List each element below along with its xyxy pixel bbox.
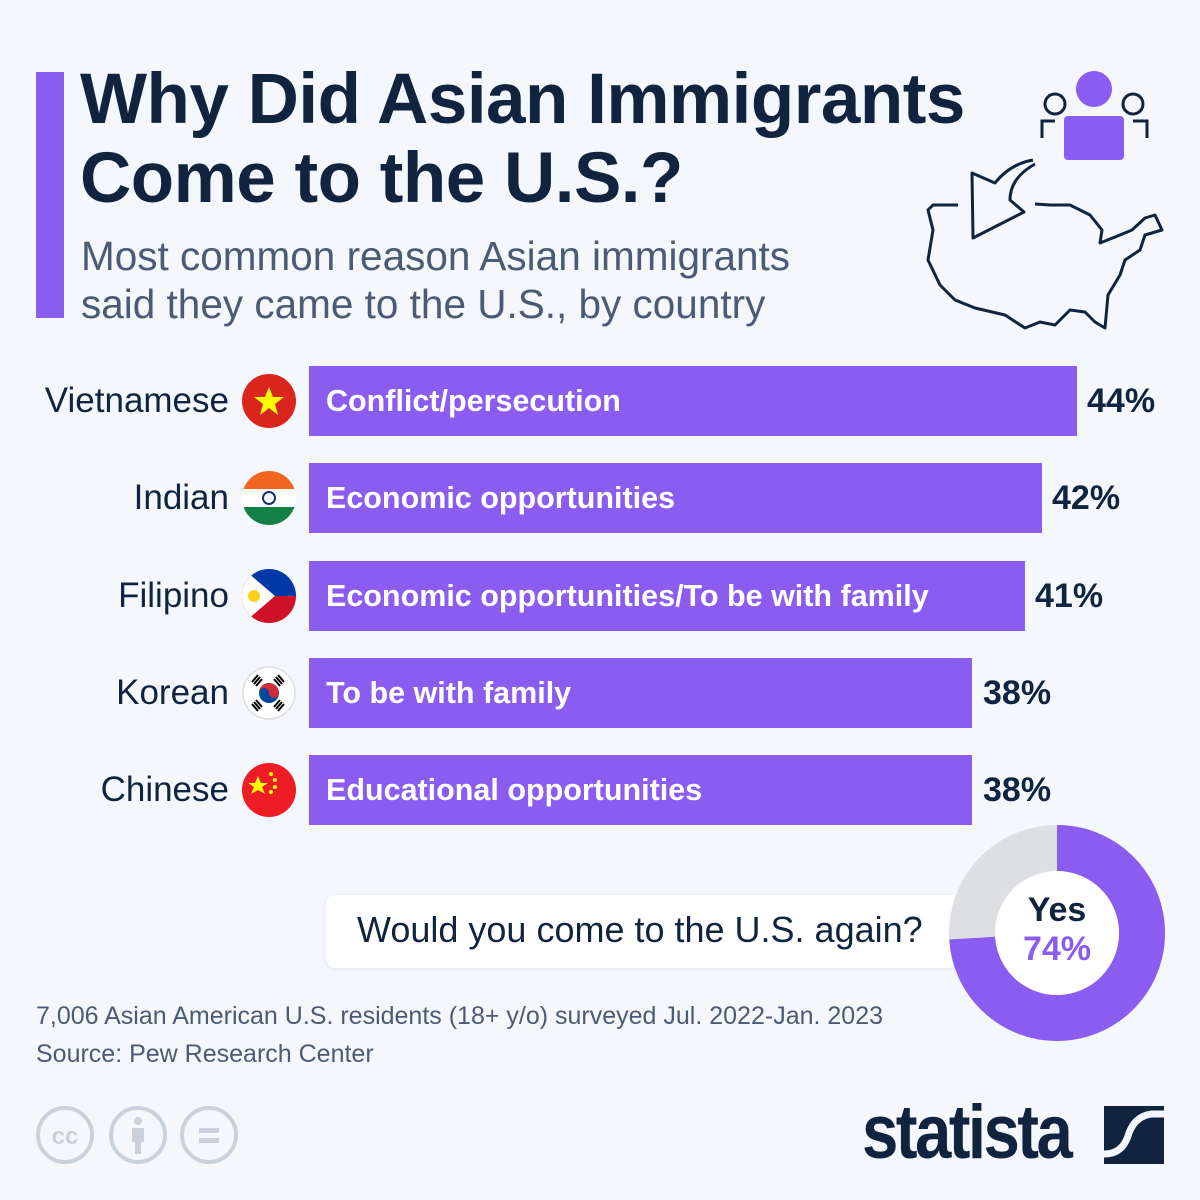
bar: Indian: Economic opportunities — [326, 481, 675, 515]
flag: China — [242, 763, 296, 817]
subtitle: said they came to the U.S., by country — [81, 281, 765, 327]
callout: question: Would you come to the U.S. again? — [357, 909, 923, 950]
flag: India — [242, 471, 296, 525]
country labels: Vietnamese — [45, 381, 229, 420]
subtitle: Most common reason Asian immigrants — [81, 233, 790, 279]
value 42%: 42% — [1052, 479, 1120, 517]
bar: Indian — [309, 463, 1042, 533]
text: Chinese — [101, 770, 229, 809]
bar: Korean — [309, 658, 972, 728]
bar: Korean: To be with family — [326, 676, 571, 710]
flag: Vietnam — [242, 374, 296, 428]
footnote: 7,006 Asian American U.S. residents (18+ y/o) surveyed Jul. 2022-Jan. 2023 — [36, 1002, 883, 1030]
flags — [242, 374, 296, 817]
footnote: Source: Pew Research Center — [36, 1040, 374, 1068]
text: Indian — [134, 478, 229, 517]
donut chart: Yes 74%: 74% — [1023, 930, 1091, 968]
callout: question — [326, 895, 986, 968]
bar: Chinese: Educational opportunities — [326, 773, 702, 807]
title — [80, 60, 965, 218]
icon: people and US map — [926, 71, 1164, 330]
bar: Vietnamese: Conflict/persecution — [326, 384, 621, 418]
statista logo — [862, 1090, 1164, 1175]
flag: Korea — [243, 667, 295, 719]
donut chart: Yes 74%: Yes — [1028, 891, 1086, 929]
license icons — [36, 1106, 238, 1164]
subtitle — [81, 233, 790, 327]
value 44%: 44% — [1087, 382, 1155, 420]
text: Filipino — [118, 576, 229, 615]
text: Korean — [116, 673, 229, 712]
value 38%: 38% — [983, 674, 1051, 712]
title: Why Did Asian Immigrants — [80, 60, 965, 139]
bar: Filipino — [309, 561, 1025, 631]
title: Come to the U.S.? — [80, 139, 683, 218]
donut chart: Yes 74% — [949, 825, 1165, 1041]
bar: Vietnamese — [309, 366, 1077, 436]
flag: Philippines — [242, 569, 296, 623]
footnote — [36, 1002, 883, 1068]
bar chart — [309, 366, 1155, 825]
license icons: cc — [52, 1123, 78, 1150]
statista logo: statista — [862, 1090, 1070, 1175]
value 41%: 41% — [1035, 577, 1103, 615]
value 38%: 38% — [983, 771, 1051, 809]
bar: Chinese — [309, 755, 972, 825]
bar: Filipino: Economic opportunities/To be with family — [326, 579, 929, 613]
accent bar — [36, 72, 64, 318]
